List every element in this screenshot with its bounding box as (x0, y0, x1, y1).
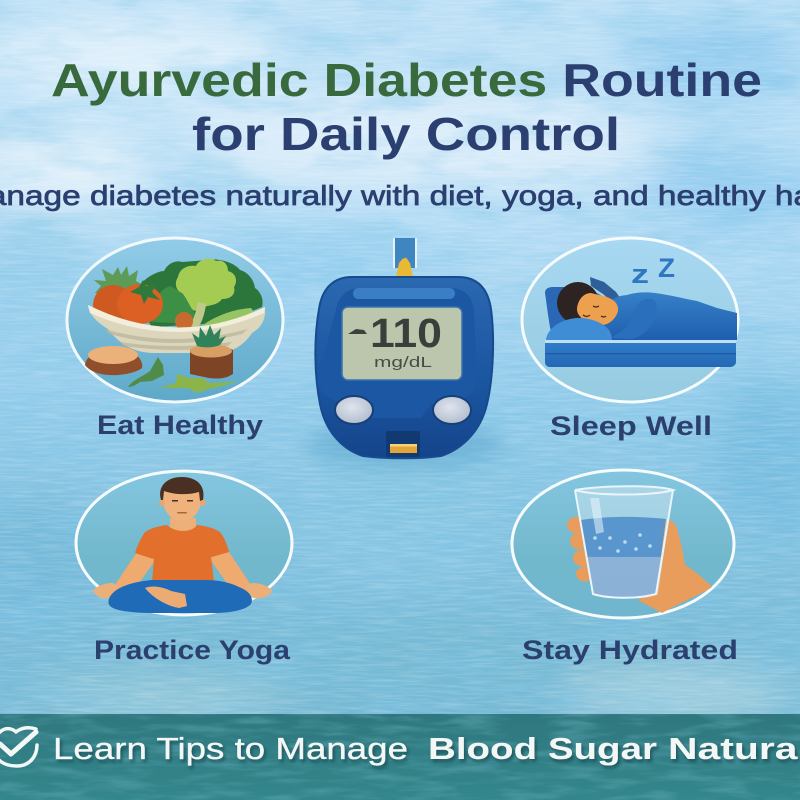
circle frame (76, 471, 292, 615)
circle frame (67, 238, 283, 402)
icon: vegetable bowl (85, 259, 265, 393)
panel: stay hydrated (512, 470, 734, 618)
banner background (0, 714, 800, 800)
label: Practice Yoga: Practice Yoga (94, 635, 291, 665)
large z: Z (658, 253, 675, 283)
banner text: regular part: Learn Tips to Manage (53, 731, 408, 766)
label: Sleep Well: Sleep Well (550, 411, 712, 441)
label: Eat Healthy: Eat Healthy (97, 410, 263, 440)
icon: meditating person (93, 477, 272, 613)
title line 1: Ayurvedic Diabetes Routine (51, 54, 762, 106)
reading 110: 110 (370, 310, 442, 356)
icon: hand holding water glass (567, 486, 712, 613)
icon: zzz (631, 253, 675, 289)
panel: sleep well (522, 238, 738, 402)
banner text: bold last word, clipped at edge: Naturally (668, 731, 800, 766)
circle frame (512, 470, 734, 618)
test strip (393, 238, 417, 277)
reading unit: mg/dL (374, 354, 432, 371)
meter body (315, 277, 493, 458)
icon: sleeping person (545, 277, 737, 367)
reading arrow (348, 329, 367, 334)
banner text: bold part: Blood Sugar (428, 731, 657, 766)
panel: glucose meter (305, 238, 505, 469)
label: Stay Hydrated: Stay Hydrated (522, 635, 738, 665)
panel: practice yoga (76, 471, 292, 615)
strip port (386, 431, 420, 457)
shadow under meter (305, 421, 505, 469)
meter screen (342, 307, 462, 380)
icon: heart with check (0, 728, 37, 766)
small z: z (631, 259, 649, 289)
panel: eat healthy (67, 238, 283, 402)
circle frame (522, 238, 738, 402)
title line 2: for Daily Control (192, 108, 620, 160)
buttons (335, 396, 471, 424)
panel: bottom banner (0, 714, 800, 800)
